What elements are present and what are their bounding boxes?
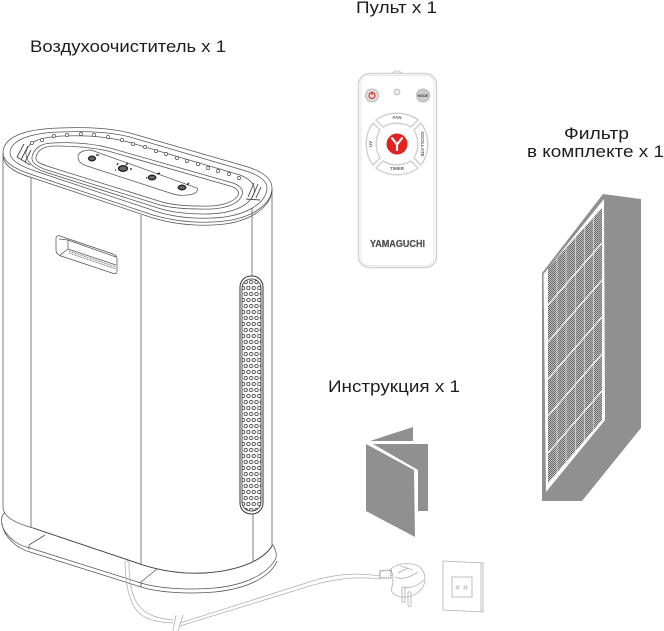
direction pad: FAN (392, 115, 402, 120)
cord (125, 561, 380, 631)
direction pad: TIMER (390, 166, 405, 171)
direction pad (366, 113, 428, 175)
purifier base (2, 512, 277, 593)
logo button (386, 134, 408, 154)
filter side and frame (542, 194, 641, 501)
plug (380, 564, 425, 606)
mode button (416, 89, 430, 102)
heading: air purifier: Воздухоочиститель х 1 (30, 37, 226, 56)
top oval (32, 143, 243, 209)
carry handle (56, 236, 117, 274)
power cord and plug (125, 561, 483, 631)
heading: filter: в комплекте х 1 (527, 142, 664, 161)
power button (366, 89, 378, 102)
side air grille (240, 276, 263, 514)
middle page (373, 444, 428, 511)
panel buttons (88, 155, 189, 190)
control panel (78, 150, 197, 195)
direction pad: UV (368, 141, 373, 147)
heading: filter: Фильтр (564, 124, 629, 143)
wall socket (443, 561, 483, 612)
direction pad: OSCILLATE (420, 131, 425, 157)
filter mesh (548, 200, 603, 490)
heading: filter (527, 124, 664, 161)
purifier body (3, 153, 272, 573)
body seams (31, 177, 253, 565)
rim vents (30, 132, 241, 180)
front page (366, 444, 415, 537)
heading: manual: Инструкция х 1 (328, 377, 460, 396)
brand name: YAMAGUCHI (370, 239, 425, 250)
indicator (394, 89, 400, 95)
remote body (358, 71, 436, 268)
back page (370, 427, 413, 441)
mode button: MODE (418, 94, 429, 98)
air purifier illustration (2, 128, 277, 593)
remote control illustration (358, 71, 436, 268)
manual illustration (366, 427, 428, 537)
top rim (3, 128, 272, 225)
rim end vents (17, 144, 261, 200)
filter face (544, 199, 605, 492)
filter illustration (542, 194, 641, 501)
